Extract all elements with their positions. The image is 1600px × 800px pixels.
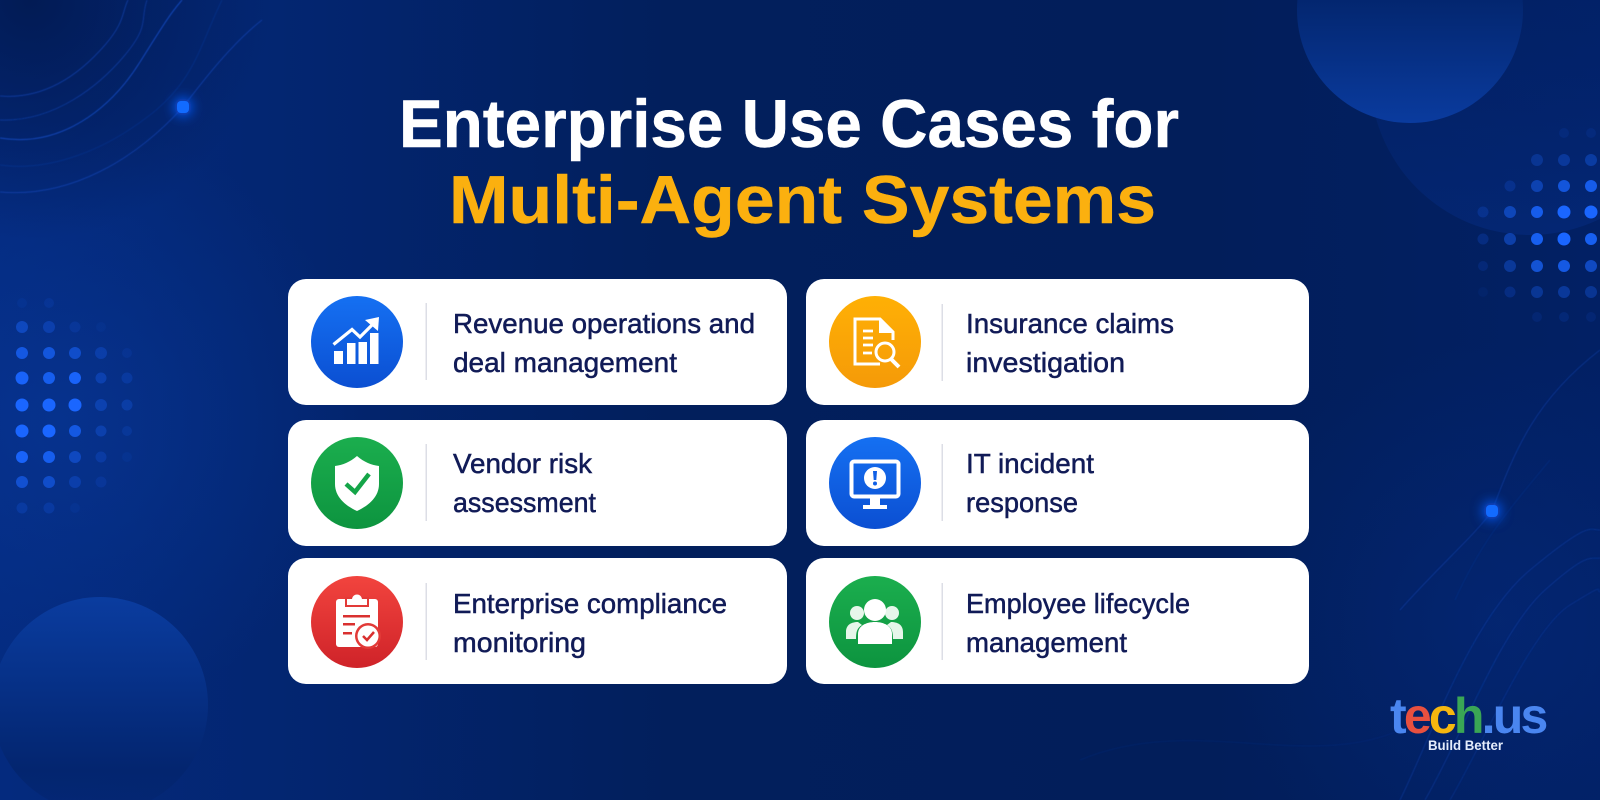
panel: vendor risk: [288, 420, 787, 546]
title: Enterprise Use Cases for: [399, 86, 1179, 162]
text: vendor risk: assessment: [453, 487, 596, 518]
icon: monitor alert: [829, 437, 921, 529]
decorative circle: top right: [1297, 0, 1600, 235]
wave lines: bottom right: [1080, 350, 1600, 800]
dot grid: left: [16, 298, 132, 514]
text: IT incident: IT incident: [966, 448, 1094, 479]
text: insurance claims: investigation: [966, 347, 1125, 378]
title: [399, 86, 1179, 238]
icon: document search: [829, 296, 921, 388]
wave lines: top left: [0, 0, 262, 193]
text: employee lifecycle: [966, 588, 1190, 658]
logo: Build Better: [1428, 737, 1504, 753]
icon: growth chart: [311, 296, 403, 388]
text: enterprise compliance: monitoring: [453, 627, 586, 658]
dot grid: right: [1478, 128, 1598, 322]
panel: insurance claims: [806, 279, 1309, 405]
glowing node: top left: [174, 98, 192, 116]
icon: people group: [829, 576, 921, 668]
panel: revenue operations: [288, 279, 787, 405]
icon: clipboard check: [311, 576, 403, 668]
panel: employee lifecycle: [806, 558, 1309, 684]
text: revenue operations: Revenue operations and: [453, 308, 755, 339]
text: insurance claims: [966, 308, 1174, 378]
text: employee lifecycle: management: [966, 627, 1127, 658]
text: revenue operations: [453, 308, 755, 378]
text: insurance claims: Insurance claims: [966, 308, 1174, 339]
text: enterprise compliance: Enterprise compliance: [453, 588, 727, 619]
panel: enterprise compliance: [288, 558, 787, 684]
text: vendor risk: Vendor risk: [453, 448, 593, 479]
text: employee lifecycle: Employee lifecycle: [966, 588, 1190, 619]
title: Multi-Agent Systems: [449, 162, 1156, 238]
decorative circle: bottom left: [0, 597, 208, 800]
text: IT incident: [966, 448, 1094, 518]
logo: tech.us: [1390, 688, 1546, 744]
glowing node: right: [1483, 502, 1501, 520]
text: enterprise compliance: [453, 588, 727, 658]
panel: IT incident: [806, 420, 1309, 546]
text: vendor risk: [453, 448, 596, 518]
icon: shield check: [311, 437, 403, 529]
text: revenue operations: deal management: [453, 347, 677, 378]
text: IT incident: response: [966, 487, 1078, 518]
